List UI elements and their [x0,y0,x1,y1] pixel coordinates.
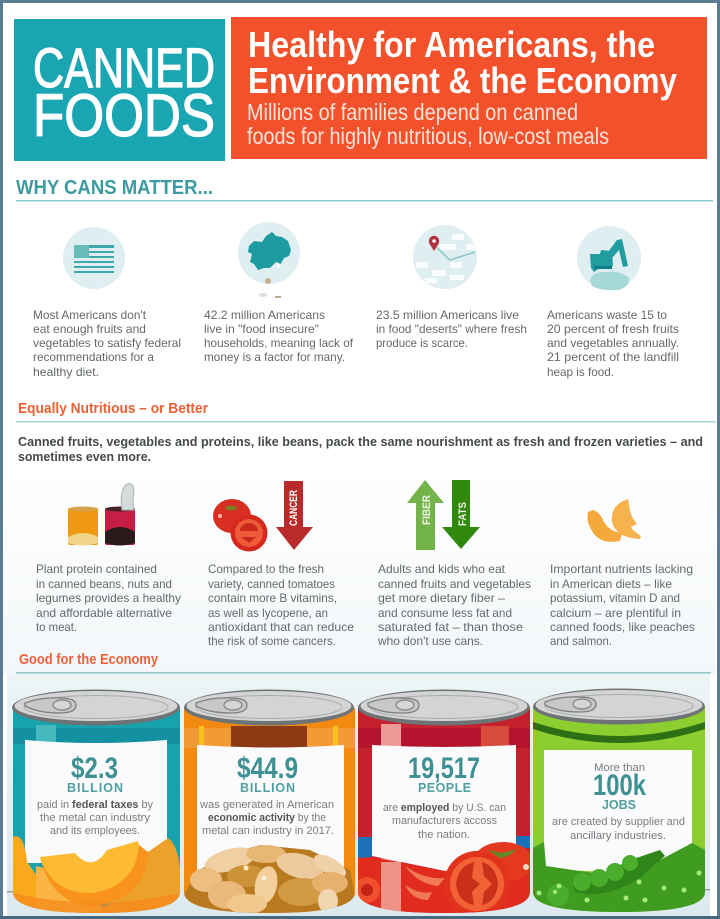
text: food waste: Americans waste 15 to [547,309,667,322]
panel: nutrition columns [36,480,695,648]
headline banner: Healthy for Americans, the [248,24,655,65]
heading: good for the economy: Good for the Economy [19,651,159,668]
text: food deserts [376,309,527,350]
stat: 44.9 billion: BILLION [240,781,295,795]
text: food insecure households: money is a factor for many. [204,351,345,364]
text: canned tomatoes: the risk of some cancers. [208,635,336,648]
text: food insecure households: live in "food insecure" [204,323,319,336]
text: fruit and vegetable intake: vegetables to satisfy federal [33,337,181,350]
can lid [12,690,180,726]
text: dietary fiber: Adults and kids who eat [378,563,506,576]
stat: 100k jobs: are created by supplier and [552,816,685,828]
stat: 2.3 billion: $2.3 [71,752,118,785]
text: canned tomatoes [208,563,354,648]
text: food deserts: in food "deserts" where fresh [376,323,527,336]
text: dietary fiber: canned fruits and vegetables [378,578,531,591]
text: dietary fiber: get more dietary fiber – [378,592,506,605]
title block: canned foods [14,19,225,161]
text: canned tomatoes: Compared to the fresh [208,563,324,576]
headline banner: foods for highly nutritious, low-cost meals [247,123,609,149]
label panel [372,745,516,871]
text: important nutrients: potassium, vitamin D and [550,592,680,605]
text: dietary fiber: who don't use cans. [377,635,483,648]
icon: fiber and fats arrows: FIBER [421,495,433,525]
text: food waste: and vegetables annually. [547,337,679,350]
text: plant protein: and affordable alternative [36,607,172,620]
stat: 2.3 billion [37,752,153,837]
stat: 100k jobs [552,762,685,842]
can lid [533,688,705,724]
text: dietary fiber [377,563,531,648]
label panel [25,740,167,863]
text: food waste: heap is food. [547,366,614,379]
stat: 44.9 billion: was generated in American [199,799,334,811]
text: plant protein: in canned beans, nuts and [36,578,172,591]
text: fruit and vegetable intake: Most Americans don't [33,309,147,322]
title block: canned foods: FOODS [33,82,215,149]
text: food waste [547,309,679,379]
stat: 100k jobs: 100k [593,769,646,802]
label panel [197,745,344,870]
stat: 19,517 people: manufacturers accoss [392,815,497,827]
heading: equally nutritious: Equally Nutritious – or Better [18,400,208,417]
text: important nutrients: canned foods, like peaches [550,621,695,634]
heading: why cans matter: WHY CANS MATTER... [16,177,213,199]
text: important nutrients: calcium – are plentiful in [550,607,681,620]
text: canned tomatoes: variety, canned tomatoes [208,578,335,591]
food: tomatoes [354,842,533,917]
stat: 44.9 billion: economic activity by the [208,812,326,824]
stat: 19,517 people: are employed by U.S. can [383,802,506,814]
text: plant protein: legumes provides a healthy [36,592,181,605]
text: food insecure households: 42.2 million Americans [204,309,325,322]
stat: 19,517 people: the nation. [418,829,470,841]
stat: 19,517 people: PEOPLE [418,781,471,795]
stat: 2.3 billion: the metal can industry [40,812,150,824]
title block: canned foods: CANNED [33,36,215,99]
headline banner [231,17,707,159]
text: important nutrients: in American diets – like [550,578,672,591]
text: fruit and vegetable intake: recommendations for a [33,351,155,364]
text: plant protein [36,563,181,634]
text: canned tomatoes: antioxidant that can reduce [208,621,354,634]
text: food deserts: produce is scarce. [376,337,468,350]
stat: 100k jobs: More than [594,762,645,774]
panel: why cans matter columns [33,222,679,379]
stat: 2.3 billion: and its employees. [50,825,140,837]
text: fruit and vegetable intake: healthy diet. [33,366,99,379]
icon: fiber and fats arrows [407,480,480,550]
headline banner: Millions of families depend on canned [247,99,578,125]
can lid [184,690,354,726]
stat: 2.3 billion: BILLION [67,781,123,795]
food: beans [184,843,355,915]
stat: 100k jobs: ancillary industries. [570,830,666,842]
stat: 19,517 people [383,752,506,841]
icon: landfill excavator [577,226,641,290]
icon: food insecure map [238,222,300,298]
label panel [544,750,692,872]
text: food deserts: 23.5 million Americans live [376,309,519,322]
text: important nutrients: and salmon. [550,635,612,648]
stat: 100k jobs: JOBS [602,798,636,812]
food: peach slices [13,836,180,915]
can: federal taxes [12,690,180,915]
text: important nutrients [550,563,695,648]
text: food waste: 21 percent of the landfill [547,351,679,364]
can lid [358,690,530,726]
icon: peach slices [588,499,641,542]
text: food waste: 20 percent of fresh fruits [547,323,679,336]
text: food insecure households: households, meaning lack of [204,337,354,350]
text: dietary fiber: saturated fat – than those [378,621,523,634]
text: plant protein: Plant protein contained [36,563,157,576]
text: canned tomatoes: as well as lycopene, an [208,607,328,620]
text: canned tomatoes: contain more B vitamins, [208,592,337,605]
text: fruit and vegetable intake: eat enough fruits and [33,323,146,336]
can: supplier jobs [533,688,705,915]
text: dietary fiber: and consume less fat and [378,607,512,620]
stat: 44.9 billion: metal can industry in 2017. [202,825,334,837]
icon: tomatoes and cancer arrow: CANCER [288,490,300,526]
text: nutrition intro [18,435,703,464]
can: economic activity [184,690,355,915]
text: food insecure households [204,309,354,364]
stat: 2.3 billion: paid in federal taxes by [37,799,153,811]
icon: two open cans [68,484,135,546]
stat: 44.9 billion [199,752,334,837]
stat: 19,517 people: 19,517 [408,752,480,785]
text: fruit and vegetable intake [33,309,181,379]
stat: 44.9 billion: $44.9 [237,752,298,785]
text: nutrition intro: sometimes even more. [18,450,151,464]
icon: tomatoes and cancer arrow [213,481,313,552]
icon: american flag [63,227,125,289]
text: important nutrients: Important nutrients lacking [550,563,693,576]
can: people employed [354,690,533,917]
icon: food desert map pin [413,225,477,289]
icon: fiber and fats arrows: FATS [457,502,469,526]
text: nutrition intro: Canned fruits, vegetables and proteins, like beans, pack the same nourishment as fresh and frozen varieties – and [18,435,703,449]
food: peas [533,842,705,915]
text: plant protein: to meat. [36,621,77,634]
